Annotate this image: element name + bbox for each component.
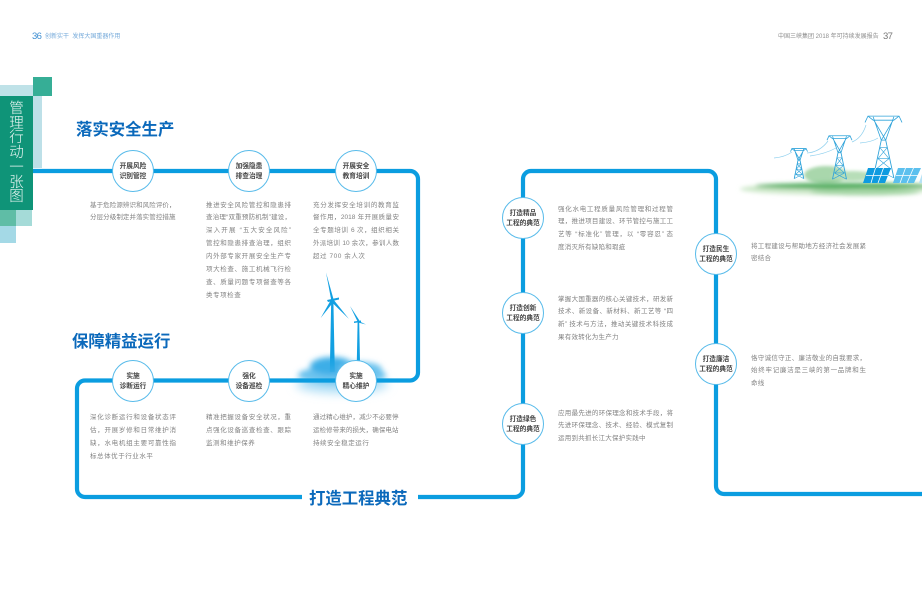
text: diagnostic operation: 缺，水电机组主要可靠性指 (90, 440, 176, 447)
circle: diagnostic operation: 诊断运行 (120, 383, 146, 390)
text: safety training (313, 202, 399, 260)
running header left: 创新实干 发挥大国重器作用 (45, 34, 120, 40)
text: hazard checks: 内外部专家开展安全生产专 (206, 253, 291, 260)
circle: innovation engineering: 打造创新 (510, 305, 536, 312)
circle: livelihood engineering (695, 233, 737, 275)
text: innovation engineering: 掌握大国重器的核心关键技术，研发新 (558, 296, 673, 302)
text: livelihood engineering: 将工程建设与帮助地方经济社会发展紧 (751, 242, 866, 250)
pylon middle (827, 136, 852, 179)
circle: quality engineering: 工程的典范 (506, 220, 540, 227)
text: quality engineering: 度消灭所有缺陷和瑕疵 (558, 244, 626, 251)
text: equipment inspection (206, 413, 291, 447)
circle: innovation engineering: 工程的典范 (506, 315, 540, 322)
text: safety training: 超过 700 余人次 (313, 253, 365, 260)
solar panels (863, 168, 922, 183)
page number right: 37 (883, 31, 892, 42)
circle: equipment inspection (228, 360, 270, 402)
text: green engineering: 先进环保理念、技术、经验、模式复制 (558, 422, 673, 429)
sidebar title: 管 (9, 101, 24, 117)
text: risk identification (90, 202, 176, 221)
text: precise maintenance: 运检修带来的损失，确保电站 (313, 427, 398, 434)
sidebar title: 动 (9, 145, 24, 161)
circle: quality engineering (502, 197, 544, 239)
heading: lean operations: 保障精益运行 (72, 333, 170, 351)
circle: equipment inspection: 强化 (242, 373, 256, 380)
circle: integrity engineering (695, 343, 737, 385)
text: integrity engineering: 始终牢记廉洁是三峡的第一品牌和生 (751, 367, 866, 374)
circle: livelihood engineering: 工程的典范 (699, 256, 733, 263)
circle: precise maintenance (335, 360, 377, 402)
text: livelihood engineering: 密结合 (751, 255, 771, 262)
circle: hazard checks: 加强隐患 (236, 163, 262, 170)
text: diagnostic operation (90, 414, 176, 460)
circle: quality engineering: 打造精品 (510, 210, 536, 217)
text: integrity engineering: 命线 (751, 380, 764, 387)
text: diagnostic operation: 估，开展岁修和日常维护消 (90, 427, 176, 434)
text: innovation engineering: 果有效转化为生产力 (558, 334, 619, 341)
text: risk identification: 分层分级制定并落实管控措施 (90, 214, 176, 221)
text: quality engineering: 强化水电工程质量风险管理和过程管 (558, 206, 673, 212)
text: risk identification: 基于危险源辨识和风险评价， (90, 202, 176, 208)
sidebar title: 理 (9, 116, 24, 132)
circle: diagnostic operation: 实施 (126, 373, 140, 380)
circle: hazard checks (228, 150, 270, 192)
sidebar colour blocks (0, 77, 52, 243)
circle: green engineering: 打造绿色 (510, 416, 536, 423)
text: innovation engineering: 新” 技术与方法，推动关键技术科技成 (558, 321, 673, 328)
text: equipment inspection: 监测和维护保养 (206, 440, 255, 447)
text: equipment inspection: 点强化设备巡查检查、跟踪 (206, 427, 291, 434)
sidebar title: 行 (9, 130, 24, 146)
circle: hazard checks: 排查治理 (236, 173, 262, 180)
pylon left (790, 149, 808, 179)
circle: livelihood engineering: 打造民生 (703, 246, 729, 253)
text: precise maintenance: 持续安全稳定运行 (313, 440, 369, 447)
sidebar title (0, 96, 33, 210)
text: precise maintenance: 通过精心维护，减少不必要停 (313, 414, 398, 421)
circle: green engineering (502, 403, 544, 445)
heading: safety production: 落实安全生产 (76, 121, 174, 139)
circle: safety training: 开展安全 (343, 163, 369, 170)
power pylons and solar panels illustration (740, 116, 922, 198)
text: hazard checks: 管控和隐患排查治理，组织 (206, 240, 291, 247)
circle: safety training: 教育培训 (343, 173, 369, 180)
circle: risk identification: 开展风险 (120, 163, 146, 170)
text: safety training: 充分发挥安全培训的教育监 (313, 202, 399, 208)
text: integrity engineering: 恪守诚信守正、廉洁敬业的自我要求， (751, 354, 866, 362)
text: hazard checks: 查治理“双重预防机制”建设， (206, 214, 291, 221)
text: livelihood engineering (751, 242, 866, 262)
circle: equipment inspection: 设备巡检 (236, 383, 262, 390)
text: innovation engineering (558, 295, 673, 341)
pylon right (865, 116, 902, 178)
sidebar title: 图 (9, 189, 24, 205)
text: green engineering (558, 409, 673, 442)
text: hazard checks: 类专项检查 (206, 292, 241, 299)
text: hazard checks: 深入开展 “五大安全风险” (206, 227, 291, 234)
text: innovation engineering: 技术、新设备、新材料、新工艺等 “四 (558, 308, 673, 315)
circle: innovation engineering (502, 292, 544, 334)
wires (774, 125, 878, 158)
circle: risk identification (112, 150, 154, 192)
text: integrity engineering (751, 354, 866, 387)
text: equipment inspection: 精准把握设备安全状况，重 (206, 414, 291, 421)
text: quality engineering (558, 206, 673, 251)
text: safety training: 督作用，2018 年开展质量安 (313, 214, 399, 221)
circle: green engineering: 工程的典范 (506, 426, 540, 433)
circle: precise maintenance: 实施 (349, 373, 363, 380)
circle: integrity engineering: 工程的典范 (699, 366, 733, 373)
text: diagnostic operation: 深化诊断运行和设备状态评 (90, 414, 176, 421)
text: safety training: 全专题培训 6 次，组织相关 (313, 227, 399, 234)
text: diagnostic operation: 标总体优于行业水平 (90, 453, 153, 460)
sidebar title: 一 (9, 160, 24, 176)
text: green engineering: 运用到共抓长江大保护实践中 (558, 435, 646, 442)
circle: precise maintenance: 精心维护 (343, 383, 369, 390)
circle: diagnostic operation (112, 360, 154, 402)
text: hazard checks: 查、质量问题专项督查等各 (206, 279, 291, 286)
sidebar title: 张 (9, 175, 24, 191)
page number left: 36 (32, 31, 41, 42)
text: quality engineering: 理，推进项目建设、环节管控与施工工 (558, 218, 673, 225)
circle: safety training (335, 150, 377, 192)
text: safety training: 外派培训 10 余次，参训人数 (313, 240, 399, 247)
circle: risk identification: 识别管控 (120, 173, 146, 180)
text: precise maintenance (313, 414, 398, 447)
running header right: 中国三峡集团 2018 年可持续发展报告 (778, 34, 879, 40)
text: quality engineering: 艺等 “标准化” 管理，以 “零容忍” 态 (558, 231, 673, 238)
hills and grass (804, 166, 875, 184)
text: hazard checks (206, 202, 291, 299)
text: hazard checks: 项大检查、施工机械飞行检 (206, 266, 291, 273)
heading: engineering models: 打造工程典范 (309, 490, 407, 508)
wind turbine illustration (292, 272, 392, 399)
text: green engineering: 应用最先进的环保理念和技术手段，将 (558, 410, 673, 416)
text: hazard checks: 推进安全风险管控和隐患排 (206, 202, 291, 208)
circle: integrity engineering: 打造廉洁 (703, 356, 729, 363)
